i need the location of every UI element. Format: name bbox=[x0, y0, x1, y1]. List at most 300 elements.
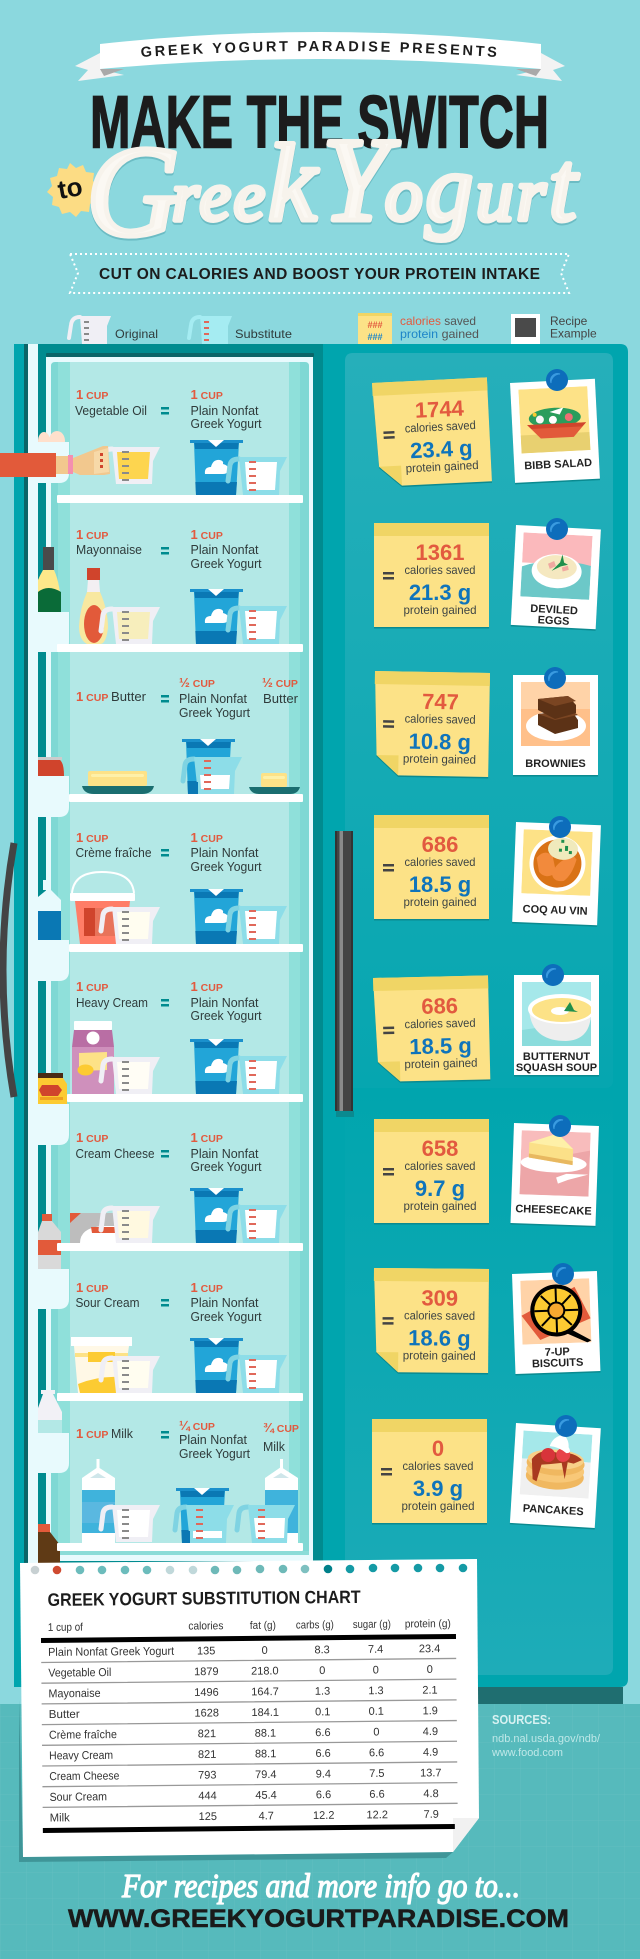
shelf 3: butter bbox=[69, 675, 303, 802]
yogurt and cup bbox=[190, 1039, 287, 1094]
protein label: protein gained bbox=[404, 895, 476, 909]
legend: substitute cup bbox=[189, 316, 232, 344]
equals bbox=[161, 1431, 169, 1438]
calories label: calories saved bbox=[404, 418, 476, 435]
row: sour cream: Sour Cream bbox=[49, 1791, 107, 1804]
legend: sticky note key bbox=[358, 313, 392, 344]
row: sour cream bbox=[49, 1788, 439, 1804]
ribbon banner: GREEK YOGURT PARADISE PRESENTS bbox=[141, 41, 496, 57]
caption: SQUASH SOUP bbox=[516, 1062, 597, 1074]
row: cream cheese: 793 bbox=[198, 1769, 217, 1782]
calories value: 1361 bbox=[416, 540, 464, 565]
row: plain nonfat greek yogurt: 8.3 bbox=[314, 1644, 330, 1656]
equals bbox=[161, 1299, 169, 1306]
note: 658 bbox=[374, 1119, 489, 1224]
door bin 5 bbox=[38, 1104, 69, 1145]
illustration: chicken bbox=[521, 829, 593, 896]
row rules bbox=[41, 1658, 458, 1807]
milk cup bbox=[101, 1505, 160, 1542]
equals bbox=[161, 999, 169, 1006]
protein value: 18.5 g bbox=[409, 872, 471, 897]
row: plain nonfat greek yogurt: 7.4 bbox=[368, 1644, 383, 1656]
equals bbox=[161, 1150, 169, 1158]
bottom rule bbox=[43, 1824, 455, 1833]
label: 1 cup creme fraiche: 1 CUP bbox=[76, 830, 108, 845]
label: 1 cup sour cream: Sour Cream bbox=[76, 1295, 140, 1310]
legend: recipe example label: Example bbox=[550, 326, 597, 340]
pin: deviled eggs bbox=[546, 518, 568, 540]
label: 1 cup mayonnaise: Mayonnaise bbox=[76, 542, 142, 557]
shelf bbox=[69, 944, 303, 952]
wine bottle bbox=[38, 547, 61, 612]
pin: biscuits bbox=[552, 1263, 574, 1285]
legend: substitute label: Substitute bbox=[235, 327, 292, 341]
table header: calories bbox=[188, 1620, 224, 1633]
note: 747 bbox=[373, 671, 490, 778]
label: yogurt: Plain Nonfat bbox=[190, 542, 259, 557]
label: yogurt: Greek Yogurt bbox=[190, 859, 262, 874]
label: yogurt: 1 CUP bbox=[190, 527, 223, 542]
title: Greek Yogurt script: o bbox=[385, 154, 426, 237]
row: cream cheese: 79.4 bbox=[255, 1769, 277, 1781]
chart title: GREEK YOGURT SUBSTITUTION CHART bbox=[48, 1587, 361, 1610]
row: creme fraiche: 821 bbox=[198, 1728, 216, 1740]
caption: DEVILED bbox=[530, 603, 578, 617]
label: 1 cup butter: 1 CUP bbox=[76, 689, 108, 704]
door bin 7 bbox=[38, 1433, 69, 1473]
recipe photos bbox=[510, 369, 601, 1529]
shelf 8: milk bbox=[57, 1418, 303, 1551]
label: 1 cup mayonnaise: 1 CUP bbox=[76, 527, 108, 542]
row: plain nonfat greek yogurt: Plain Nonfat Greek Yogurt bbox=[48, 1646, 175, 1659]
row: mayonaise: 1.3 bbox=[368, 1685, 384, 1697]
row: sour cream: 4.8 bbox=[423, 1788, 439, 1800]
label: 1 cup mayonnaise bbox=[76, 527, 142, 557]
row: vegetable oil: 0 bbox=[373, 1664, 379, 1676]
pin: bibb salad bbox=[546, 369, 568, 391]
protein label: protein gained bbox=[404, 1199, 476, 1213]
shelf 2: mayonnaise bbox=[57, 527, 303, 652]
shelf bbox=[57, 1243, 303, 1251]
label: 1 cup creme fraiche bbox=[76, 830, 152, 860]
row: heavy cream: 88.1 bbox=[255, 1748, 276, 1760]
label: 1 cup butter bbox=[76, 689, 147, 704]
equals sign bbox=[383, 1168, 394, 1176]
shelf 6: cream cheese bbox=[57, 1130, 303, 1251]
row: creme fraiche: 6.6 bbox=[315, 1727, 331, 1739]
row: butter: 1.9 bbox=[423, 1705, 438, 1717]
label: half cup butter bbox=[262, 675, 299, 706]
label: 1 cup cream cheese: 1 CUP bbox=[76, 1130, 108, 1145]
equals bbox=[161, 695, 169, 702]
row: creme fraiche: 88.1 bbox=[255, 1728, 276, 1740]
caption: PANCAKES bbox=[522, 1503, 584, 1518]
illustration: biscuits skillet bbox=[520, 1278, 592, 1344]
substitution chart paper bbox=[19, 1559, 479, 1862]
calories value: 686 bbox=[421, 993, 458, 1019]
sour cream cup bbox=[101, 1356, 160, 1393]
three quarter cup bbox=[237, 1505, 295, 1543]
row: plain nonfat greek yogurt: 23.4 bbox=[419, 1643, 440, 1655]
pin: pancakes bbox=[555, 1415, 577, 1437]
row: milk: Milk bbox=[50, 1812, 70, 1825]
footer script line: For recipes and more info go to... bbox=[121, 1868, 520, 1905]
shelf 1: vegetable oil bbox=[0, 387, 303, 503]
label: yogurt bbox=[190, 1130, 262, 1174]
milk carton left bbox=[82, 1459, 115, 1543]
label: 1 cup creme fraiche: Crème fraîche bbox=[76, 845, 152, 860]
row: creme fraiche: 4.9 bbox=[423, 1726, 438, 1738]
photo: coq au vin bbox=[512, 822, 601, 927]
shelf bbox=[57, 495, 303, 503]
photo: brownies bbox=[513, 675, 598, 776]
chart table bbox=[41, 1586, 458, 1833]
label: quarter cup yogurt bbox=[179, 1418, 250, 1461]
protein value: 18.6 g bbox=[408, 1325, 471, 1351]
protein label: protein gained bbox=[403, 752, 476, 767]
butter on plate bbox=[82, 771, 154, 794]
sour cream tub bbox=[71, 1337, 132, 1393]
row: cream cheese: 13.7 bbox=[420, 1767, 442, 1780]
label: yogurt: Plain Nonfat bbox=[190, 403, 259, 418]
calories label: calories saved bbox=[404, 1159, 476, 1173]
title: Greek Yogurt script: ur bbox=[476, 154, 549, 237]
label: 1 cup milk bbox=[76, 1426, 133, 1441]
yogurt and cup bbox=[190, 889, 287, 944]
door bin 3 bbox=[38, 776, 69, 817]
equals sign bbox=[383, 572, 394, 580]
equals sign bbox=[383, 431, 395, 439]
title: Greek Yogurt script: g bbox=[426, 135, 476, 241]
label: 1 cup heavy cream bbox=[76, 979, 148, 1010]
row: mayonaise: Mayonaise bbox=[48, 1688, 101, 1700]
row: heavy cream: 6.6 bbox=[369, 1747, 384, 1759]
label: 1 cup vegetable oil: Vegetable Oil bbox=[75, 403, 147, 418]
caption: CHEESECAKE bbox=[515, 1203, 592, 1218]
brown bottle bbox=[38, 1524, 60, 1563]
caption: EGGS bbox=[537, 614, 570, 628]
red can bbox=[38, 757, 64, 776]
protein value: 23.4 g bbox=[410, 435, 473, 463]
equals bbox=[161, 407, 169, 414]
badge: to: to bbox=[55, 171, 85, 205]
label: yogurt: 1 CUP bbox=[190, 1280, 223, 1295]
door items bbox=[38, 431, 69, 1563]
paper shadow bbox=[19, 1700, 453, 1862]
milk carton in door bbox=[38, 880, 61, 940]
table header: 1 cup of bbox=[48, 1622, 84, 1634]
calories value: 747 bbox=[422, 689, 459, 714]
label: 1 cup cream cheese: Cream Cheese bbox=[76, 1146, 154, 1161]
row: milk: 125 bbox=[198, 1811, 217, 1823]
row: butter: 0.1 bbox=[315, 1706, 330, 1718]
row: creme fraiche: Crème fraîche bbox=[49, 1729, 117, 1742]
label: quarter cup yogurt: ¼ CUP bbox=[179, 1418, 215, 1433]
yogurt and cup bbox=[190, 1338, 287, 1393]
photo: butternut squash soup bbox=[514, 975, 599, 1076]
row: plain nonfat greek yogurt: 135 bbox=[197, 1645, 215, 1657]
shelf bbox=[57, 1393, 303, 1401]
row: mayonaise bbox=[48, 1685, 438, 1700]
milk bottle bbox=[38, 1390, 62, 1433]
table header: sugar (g) bbox=[353, 1619, 391, 1631]
label: yogurt: Greek Yogurt bbox=[190, 1008, 262, 1023]
table header: carbs (g) bbox=[296, 1619, 334, 1632]
note: 686 second bbox=[373, 975, 490, 1083]
protein label: protein gained bbox=[402, 1499, 474, 1513]
illustration: soup bbox=[522, 982, 591, 1046]
row: vegetable oil: 0 bbox=[319, 1665, 325, 1677]
ribbon banner bbox=[75, 32, 565, 81]
legend bbox=[69, 313, 597, 344]
row: vegetable oil: 218.0 bbox=[251, 1665, 279, 1678]
illustration: eggs bbox=[520, 532, 592, 600]
interior frame bbox=[46, 357, 313, 1561]
sources heading: SOURCES: bbox=[492, 1712, 551, 1727]
bucket bbox=[70, 872, 135, 944]
row: butter: 184.1 bbox=[251, 1707, 279, 1719]
table header: fat (g) bbox=[250, 1620, 276, 1632]
legend: sticky note key: ### bbox=[367, 320, 383, 330]
legend: recipe example label: Recipe bbox=[550, 314, 588, 328]
cheese cup bbox=[101, 1206, 160, 1243]
row: heavy cream bbox=[49, 1747, 438, 1762]
label: quarter cup yogurt: Plain Nonfat bbox=[179, 1432, 247, 1447]
label: 1 cup sour cream bbox=[76, 1280, 140, 1310]
label: 1 cup butter: Butter bbox=[111, 689, 147, 704]
header rule bbox=[41, 1634, 456, 1643]
pin: cheesecake bbox=[549, 1115, 571, 1137]
protein value: 21.3 g bbox=[409, 580, 471, 605]
jam jar bbox=[38, 1073, 67, 1104]
label: half cup yogurt bbox=[179, 675, 250, 720]
calories label: calories saved bbox=[404, 855, 476, 869]
photo: deviled eggs bbox=[511, 525, 601, 631]
row: mayonaise: 164.7 bbox=[251, 1686, 279, 1698]
subtitle banner: CUT ON CALORIES AND BOOST YOUR PROTEIN INTAKE bbox=[99, 266, 540, 283]
calories label: calories saved bbox=[404, 1308, 475, 1323]
protein value: 10.8 g bbox=[408, 729, 471, 755]
label: quarter cup yogurt: Greek Yogurt bbox=[179, 1446, 250, 1461]
protein label: protein gained bbox=[404, 603, 476, 617]
row: cream cheese: 7.5 bbox=[369, 1768, 385, 1780]
binding holes bbox=[31, 1564, 467, 1574]
calories value: 686 bbox=[422, 832, 458, 857]
legend: sticky note key: ### bbox=[367, 332, 383, 342]
equals sign bbox=[383, 720, 394, 728]
half yogurt and half cup bbox=[182, 739, 242, 794]
calories value: 658 bbox=[422, 1136, 458, 1161]
calories label: calories saved bbox=[402, 1459, 474, 1473]
caption: BISCUITS bbox=[532, 1357, 584, 1370]
label: yogurt bbox=[190, 830, 262, 874]
calories value: 0 bbox=[432, 1436, 444, 1461]
photo: 7-up biscuits bbox=[512, 1271, 600, 1375]
label: 1 cup milk: 1 CUP bbox=[76, 1426, 108, 1441]
equals sign bbox=[383, 1027, 394, 1034]
label: yogurt: Greek Yogurt bbox=[190, 556, 262, 571]
row: vegetable oil: 1879 bbox=[194, 1666, 219, 1678]
label: 1 cup vegetable oil bbox=[75, 387, 147, 418]
quarter yogurt and cup bbox=[175, 1488, 234, 1543]
row: butter: Butter bbox=[49, 1709, 80, 1721]
badge: to bbox=[47, 163, 99, 217]
row: cream cheese: Cream Cheese bbox=[49, 1770, 119, 1783]
row: butter: 0.1 bbox=[369, 1706, 384, 1718]
calories label: calories saved bbox=[405, 712, 476, 727]
label: yogurt: Plain Nonfat bbox=[190, 1295, 259, 1310]
title: Greek Yogurt script: Y bbox=[322, 113, 400, 246]
illustration: cheesecake bbox=[520, 1130, 591, 1196]
door bin 2 bbox=[38, 612, 69, 652]
equals bbox=[161, 547, 169, 554]
note: 1361 bbox=[374, 523, 489, 628]
row: butter: 1628 bbox=[194, 1707, 219, 1720]
label: three quarter cup milk bbox=[263, 1420, 299, 1454]
protein label: protein gained bbox=[403, 1348, 476, 1363]
label: yogurt: 1 CUP bbox=[190, 1130, 223, 1145]
note: 309 bbox=[373, 1268, 489, 1374]
legend: calories saved: calories saved bbox=[400, 314, 476, 328]
fridge handle right bbox=[335, 831, 354, 1117]
protein value: 18.5 g bbox=[409, 1033, 472, 1059]
caption: BUTTERNUT bbox=[523, 1051, 590, 1063]
shelf bbox=[57, 644, 303, 652]
label: 1 cup heavy cream: 1 CUP bbox=[76, 979, 108, 994]
eggs bbox=[38, 431, 65, 451]
label: yogurt bbox=[190, 527, 262, 571]
label: yogurt bbox=[190, 387, 262, 431]
protein label: protein gained bbox=[405, 458, 479, 475]
illustration: pancakes bbox=[520, 1430, 592, 1498]
shelf bbox=[57, 1543, 303, 1551]
row: mayonaise: 2.1 bbox=[422, 1685, 438, 1697]
floor bbox=[0, 1704, 640, 1959]
cream cup bbox=[101, 907, 160, 944]
label: half cup butter: ½ CUP bbox=[262, 675, 298, 690]
label: 1 cup cream cheese bbox=[76, 1130, 154, 1161]
row: milk: 12.2 bbox=[313, 1810, 335, 1822]
caption: BIBB SALAD bbox=[524, 457, 592, 472]
label: half cup yogurt: Greek Yogurt bbox=[179, 705, 250, 720]
label: 1 cup sour cream: 1 CUP bbox=[76, 1280, 108, 1295]
label: three quarter cup milk: ¾ CUP bbox=[263, 1420, 299, 1435]
note: 686 bbox=[374, 815, 489, 920]
row: vegetable oil bbox=[48, 1664, 433, 1680]
equals bbox=[161, 849, 169, 856]
title: Greek Yogurt script: t bbox=[549, 131, 579, 242]
milk carton right bbox=[265, 1459, 298, 1543]
sources links: ndb.nal.usda.gov/ndb/ bbox=[492, 1733, 601, 1745]
right panel lower bbox=[345, 1088, 613, 1675]
legend: original label: Original bbox=[115, 327, 158, 341]
row: heavy cream: 821 bbox=[198, 1749, 216, 1761]
row: sour cream: 444 bbox=[198, 1790, 217, 1802]
row: sour cream: 6.6 bbox=[316, 1789, 331, 1801]
title: Greek Yogurt script: G bbox=[86, 120, 180, 264]
pin: soup bbox=[542, 964, 564, 986]
row: butter bbox=[49, 1705, 438, 1721]
illustration: brownies bbox=[521, 682, 590, 746]
hand holding cup bbox=[0, 446, 110, 477]
protein value: 3.9 g bbox=[413, 1476, 463, 1501]
pin: brownies bbox=[544, 667, 566, 689]
oil cup bbox=[101, 447, 160, 484]
photo: cheesecake bbox=[510, 1123, 599, 1227]
calories label: calories saved bbox=[404, 1016, 476, 1031]
shelf 5: heavy cream bbox=[67, 979, 303, 1102]
row: vegetable oil: 0 bbox=[427, 1664, 433, 1676]
paper fold bbox=[453, 1818, 479, 1852]
legend: recipe swatch bbox=[511, 314, 540, 344]
row: creme fraiche bbox=[49, 1726, 438, 1742]
label: half cup butter: Butter bbox=[263, 691, 299, 706]
title: Greek Yogurt script: k bbox=[268, 122, 319, 244]
label: 1 cup milk: Milk bbox=[111, 1426, 133, 1441]
row: heavy cream: 6.6 bbox=[315, 1748, 331, 1760]
label: yogurt: Plain Nonfat bbox=[190, 1146, 259, 1161]
label: yogurt: 1 CUP bbox=[190, 979, 223, 994]
row: milk: 7.9 bbox=[424, 1809, 439, 1821]
label: yogurt bbox=[190, 979, 262, 1023]
legend: original cup bbox=[69, 316, 111, 344]
half butter on plate bbox=[249, 773, 300, 794]
label: yogurt: 1 CUP bbox=[190, 387, 223, 402]
paper sheet bbox=[20, 1559, 479, 1857]
right panel upper bbox=[345, 353, 613, 1088]
row: creme fraiche: 0 bbox=[373, 1726, 380, 1739]
row: cream cheese bbox=[49, 1767, 442, 1783]
door bin 6 bbox=[38, 1269, 69, 1309]
row: cream cheese: 9.4 bbox=[316, 1768, 331, 1781]
label: yogurt: Greek Yogurt bbox=[190, 1309, 262, 1324]
yogurt and cup bbox=[190, 1188, 287, 1243]
mayo bottle bbox=[79, 568, 108, 644]
row: vegetable oil: Vegetable Oil bbox=[48, 1667, 111, 1680]
shelf bbox=[67, 1094, 303, 1102]
row: heavy cream: Heavy Cream bbox=[49, 1750, 113, 1762]
cream cup bbox=[101, 1057, 160, 1094]
interior top bar bbox=[46, 353, 314, 357]
note: 0 bbox=[372, 1419, 487, 1524]
row: milk: 4.7 bbox=[259, 1810, 274, 1822]
shelf 4: creme fraiche bbox=[69, 830, 303, 952]
cream cheese box bbox=[70, 1213, 117, 1243]
row: milk: 12.2 bbox=[366, 1809, 388, 1821]
label: three quarter cup milk: Milk bbox=[263, 1439, 285, 1454]
table header bbox=[48, 1618, 451, 1634]
table header: protein (g) bbox=[405, 1618, 451, 1630]
label: yogurt: 1 CUP bbox=[190, 830, 223, 845]
equals sign bbox=[381, 1468, 392, 1476]
caption: 7-UP bbox=[545, 1346, 570, 1359]
sources links: www.food.com bbox=[491, 1747, 563, 1759]
legend: protein gained: protein gained bbox=[400, 327, 479, 341]
yogurt and cup bbox=[190, 440, 287, 495]
row: plain nonfat greek yogurt bbox=[48, 1643, 440, 1659]
equals sign bbox=[383, 1317, 394, 1325]
footer url: WWW.GREEKYOGURTPARADISE.COM bbox=[68, 1905, 569, 1933]
fridge handle left bbox=[3, 843, 14, 1097]
photo: bibb salad bbox=[510, 379, 600, 484]
mayo cup bbox=[101, 607, 160, 644]
label: yogurt: Greek Yogurt bbox=[190, 1159, 262, 1174]
label: yogurt: Greek Yogurt bbox=[190, 416, 262, 431]
door bin 4 bbox=[38, 940, 69, 981]
shelf bbox=[69, 794, 303, 802]
row: plain nonfat greek yogurt: 0 bbox=[261, 1645, 268, 1657]
yogurt and cup bbox=[190, 589, 287, 644]
